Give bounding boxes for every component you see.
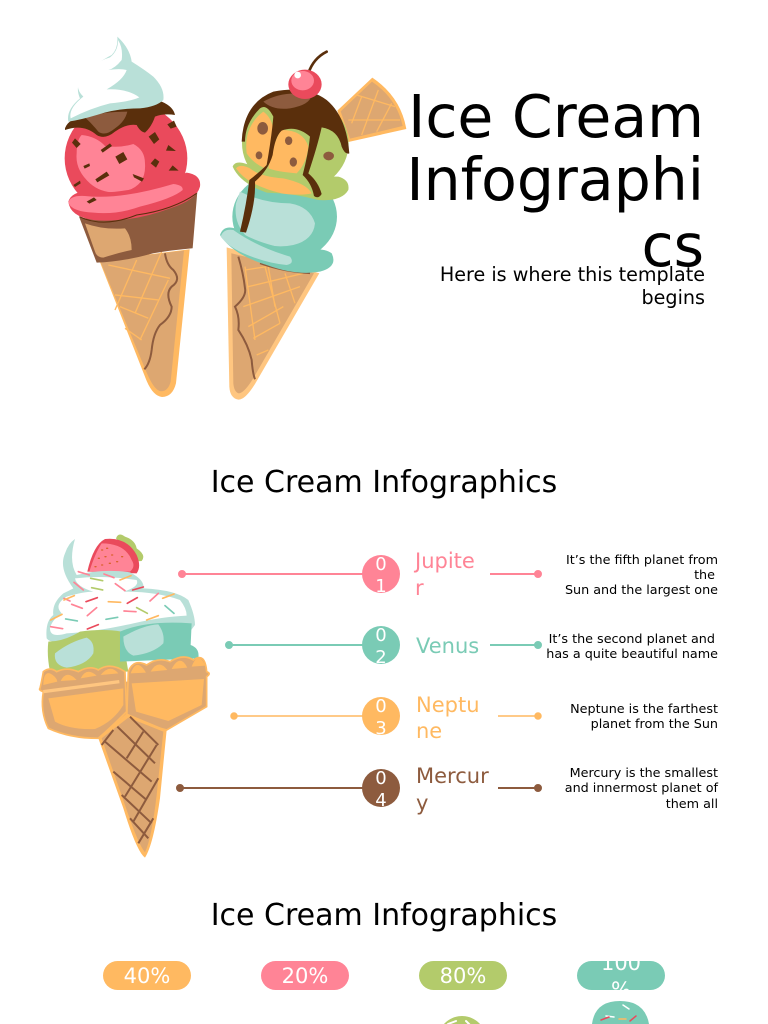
description: has a quite beautiful name (546, 647, 718, 662)
icon: red scoop ice cream cone (65, 37, 200, 397)
right wafer cup (127, 657, 209, 730)
number badge (362, 696, 400, 739)
cup join backing (100, 682, 133, 740)
cone (99, 249, 190, 397)
chocolate chips (72, 121, 179, 204)
pill: 100%: % (611, 978, 631, 1002)
left wafer cup (40, 666, 127, 738)
number badge: 1 (375, 576, 387, 597)
connector (231, 713, 541, 719)
pill: 20%: 20% (282, 964, 328, 988)
description: them all (666, 797, 718, 812)
waffle cone (98, 713, 167, 858)
number badge: 2 (375, 647, 387, 668)
number badge: 0 (375, 554, 387, 575)
section heading: Ice Cream Infographics (211, 465, 557, 500)
row: Venus (226, 625, 718, 668)
title: Infographi (406, 146, 704, 214)
description: and innermost planet of (565, 781, 718, 796)
title (406, 83, 704, 280)
name: Jupite (413, 549, 475, 573)
number badge: 4 (375, 790, 387, 811)
subtitle: Here is where this template (440, 263, 705, 286)
description (565, 766, 718, 812)
number badge: 0 (375, 625, 387, 646)
name: Venus (416, 634, 479, 658)
subtitle (440, 263, 705, 309)
pill: 40% (103, 961, 191, 990)
name (413, 549, 475, 600)
icon: double wafer ice cream cone with sprinkles (40, 535, 209, 858)
row: Jupiter (179, 549, 718, 600)
whipped cream (68, 37, 164, 122)
mint scoop (220, 172, 337, 273)
row: Mercury (177, 764, 718, 815)
title: cs (641, 212, 704, 280)
connector (179, 571, 541, 577)
description (565, 553, 718, 598)
name (416, 693, 480, 743)
title: Ice Cream (408, 83, 704, 151)
number badge: 0 (375, 696, 387, 717)
waffle cone (227, 247, 319, 400)
description: Mercury is the smallest (570, 766, 718, 781)
green and mint scoops (48, 623, 199, 672)
sauce highlight (85, 112, 127, 134)
description (570, 702, 718, 732)
swirl cream (46, 539, 195, 642)
description: planet from the Sun (591, 717, 718, 732)
name: Mercur (416, 764, 489, 788)
pill: 40%: 40% (124, 964, 170, 988)
description (546, 632, 718, 662)
number badge (362, 625, 400, 668)
connector (177, 785, 541, 791)
chocolate sleeve (79, 192, 197, 263)
number badge (362, 554, 400, 597)
strawberry scoop (65, 102, 200, 222)
description: It’s the second planet and (549, 632, 715, 647)
strawberry (87, 535, 143, 573)
cherry (288, 52, 327, 99)
icon: cherry topped ice cream cone (220, 52, 406, 400)
number badge: 0 (375, 768, 387, 789)
pill: 80%: 80% (440, 964, 486, 988)
pill: 80% (419, 961, 507, 990)
name: Neptu (416, 693, 480, 717)
pill: 100% (577, 951, 665, 1002)
pistachio scoop (233, 95, 349, 200)
sleeve highlight (85, 223, 132, 258)
number badge (362, 768, 400, 811)
chocolate sauce with drips (240, 90, 349, 233)
number badge: 3 (375, 718, 387, 739)
row: Neptune (231, 693, 718, 743)
name: ne (416, 719, 442, 743)
description: It’s the fifth planet from (566, 553, 718, 568)
chocolate sauce (65, 102, 175, 137)
description: the (694, 568, 715, 583)
icon: green scoop top (437, 1016, 487, 1024)
name: r (415, 576, 424, 600)
icon: teal scoop top with sprinkles (592, 1001, 649, 1024)
name (416, 764, 489, 815)
back wafer (337, 78, 406, 142)
connector (226, 642, 541, 648)
sprinkles (51, 572, 174, 629)
name: y (416, 791, 428, 815)
description: Sun and the largest one (565, 583, 718, 598)
section heading: Ice Cream Infographics (211, 898, 557, 933)
pill: 100%: 100 (601, 951, 641, 975)
pill: 20% (261, 961, 349, 990)
subtitle: begins (642, 286, 705, 309)
description: Neptune is the farthest (570, 702, 718, 717)
